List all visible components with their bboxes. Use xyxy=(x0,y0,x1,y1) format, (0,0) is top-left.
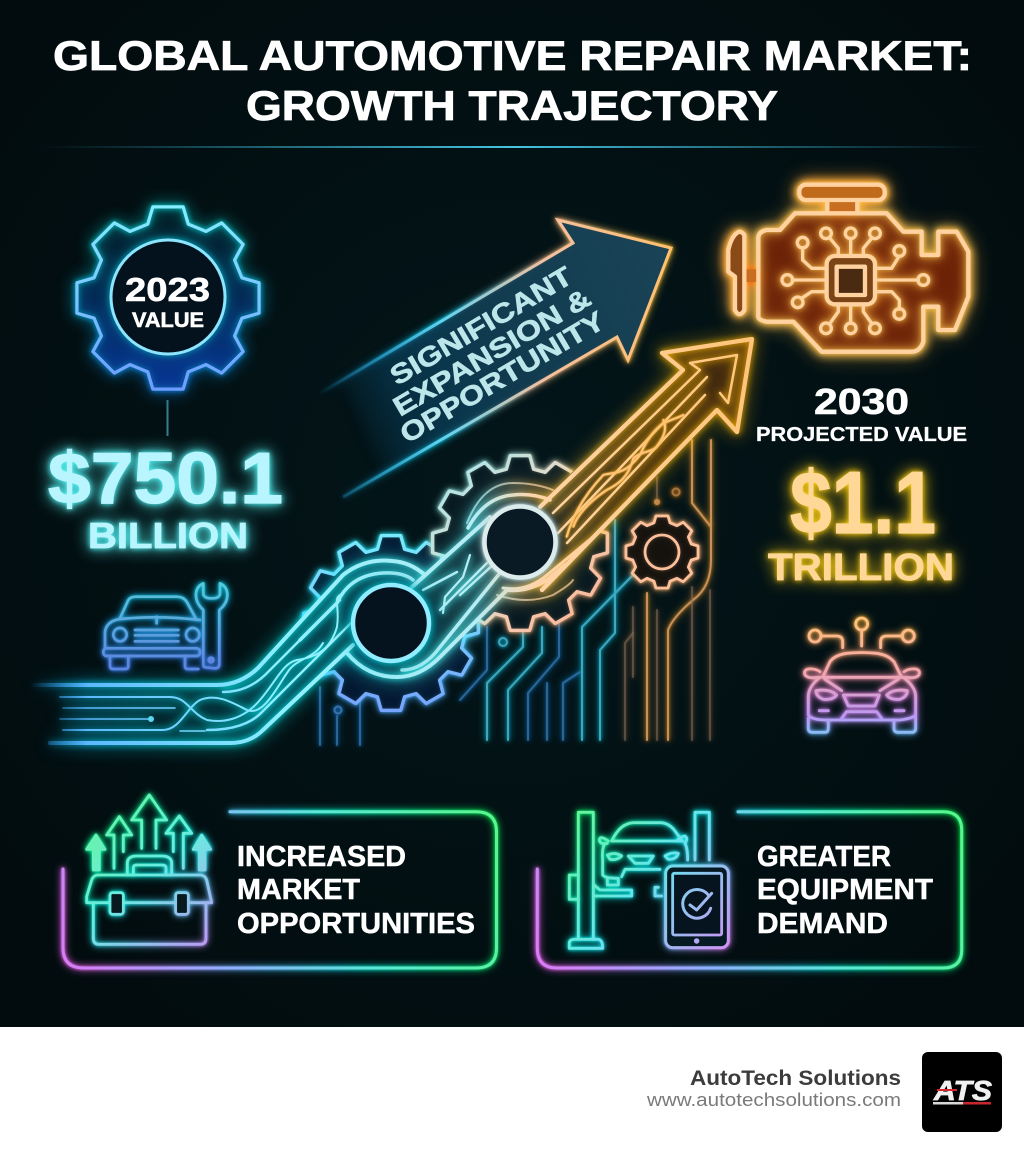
gear behind lower node xyxy=(304,536,478,710)
value: $750.1 billion xyxy=(48,439,283,556)
panel text: EQUIPMENT xyxy=(757,874,933,906)
logo: ATS xyxy=(922,1052,1002,1132)
2023 label: VALUE xyxy=(132,309,204,332)
brand name and url: www.autotechsolutions.com xyxy=(646,1089,901,1110)
panel frame xyxy=(63,812,496,968)
panel text: OPPORTUNITIES xyxy=(237,908,475,940)
icon: car with wrench xyxy=(103,583,227,669)
panel: 2023 value xyxy=(48,207,283,669)
panel text: DEMAND xyxy=(757,908,888,940)
panel text: MARKET xyxy=(237,874,360,906)
title xyxy=(53,32,972,129)
arrow label: EXPANSION & xyxy=(388,283,596,422)
gear behind upper node xyxy=(433,456,607,630)
2030 label: PROJECTED VALUE xyxy=(756,424,967,446)
logo: ATS: ATS xyxy=(933,1075,992,1106)
value: $1.1 trillion: TRILLION xyxy=(768,547,954,589)
title: GLOBAL AUTOMOTIVE REPAIR MARKET: xyxy=(53,32,972,79)
arrow label xyxy=(385,260,610,449)
value: $750.1 billion: $750.1 xyxy=(48,439,283,519)
big arrow: significant expansion and opportunity xyxy=(317,220,671,497)
icon: 2023 gear xyxy=(77,207,259,389)
upper node circle xyxy=(484,506,556,578)
panel text xyxy=(237,841,475,940)
panel frame xyxy=(537,812,962,968)
icon: engine with chip xyxy=(728,185,968,352)
lower node circle xyxy=(353,585,429,661)
value: $1.1 trillion xyxy=(768,453,954,589)
2030 label xyxy=(756,381,967,446)
arrow label: OPPORTUNITY xyxy=(395,306,610,449)
orange helix xyxy=(567,415,683,537)
value: $1.1 trillion: $1.1 xyxy=(790,453,936,552)
arrow label: SIGNIFICANT xyxy=(385,260,578,391)
panel text xyxy=(757,841,933,940)
small orange gear xyxy=(626,516,698,588)
footer xyxy=(0,1027,1024,1154)
panel: greater equipment demand xyxy=(537,812,962,968)
2023 label xyxy=(125,271,210,332)
value: $750.1 billion: BILLION xyxy=(88,515,248,556)
brand name and url: AutoTech Solutions xyxy=(690,1066,901,1090)
2030 label: 2030 xyxy=(814,381,909,422)
title: GROWTH TRAJECTORY xyxy=(246,82,778,129)
brand name and url xyxy=(646,1066,901,1110)
icon: car lift and tablet xyxy=(569,812,728,948)
2023 label: 2023 xyxy=(125,271,210,308)
ribbon rails xyxy=(30,339,752,743)
panel text: GREATER xyxy=(757,841,891,873)
growth ribbon arrow with gears xyxy=(30,339,752,743)
circuit traces xyxy=(320,440,711,745)
icon: toolbox with arrows xyxy=(87,795,212,944)
panel text: INCREASED xyxy=(237,841,406,873)
icon: connected car xyxy=(805,618,919,732)
panel: 2030 projected value xyxy=(728,185,968,732)
panel: increased market opportunities xyxy=(63,795,496,968)
